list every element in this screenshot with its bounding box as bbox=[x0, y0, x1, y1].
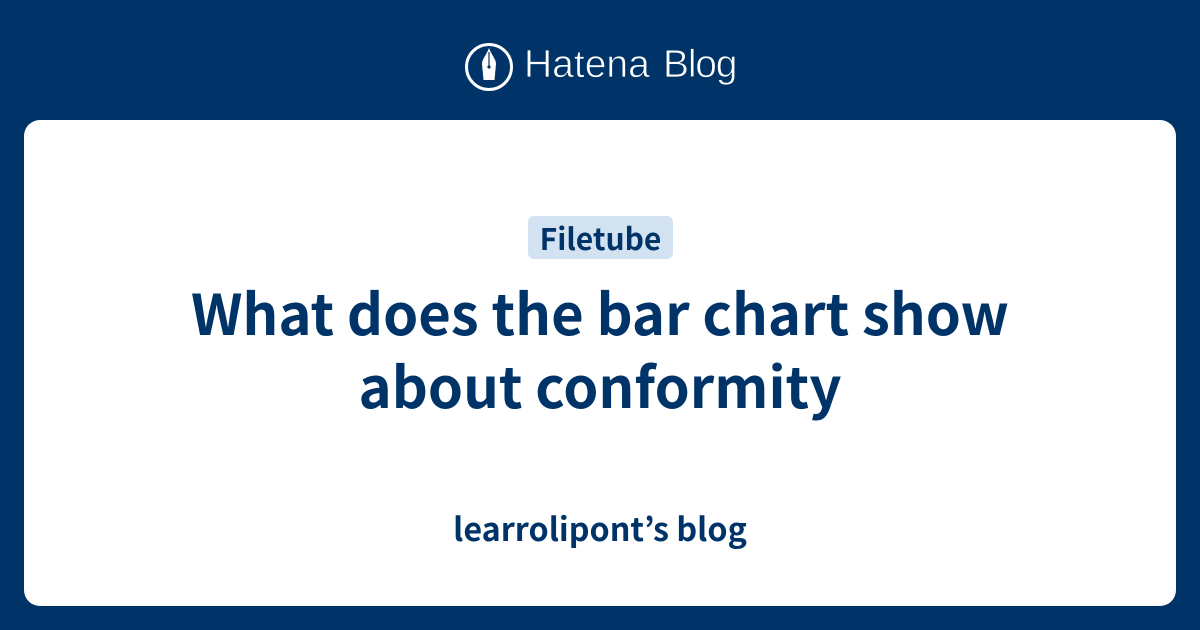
logo wordmark: Hatena bbox=[524, 43, 650, 86]
white card panel bbox=[24, 120, 1176, 606]
logo: Hatena Blog bbox=[465, 43, 736, 91]
logo wordmark: Blog bbox=[663, 43, 736, 86]
logo wordmark bbox=[524, 43, 736, 86]
title bbox=[191, 271, 1009, 425]
blog name: learrolipont’s blog bbox=[453, 505, 747, 551]
category tag: Filetube: Filetube bbox=[540, 215, 661, 259]
title: about conformity bbox=[359, 344, 841, 425]
icon: fountain pen nib in circle bbox=[465, 43, 513, 91]
title: What does the bar chart show bbox=[191, 271, 1009, 352]
